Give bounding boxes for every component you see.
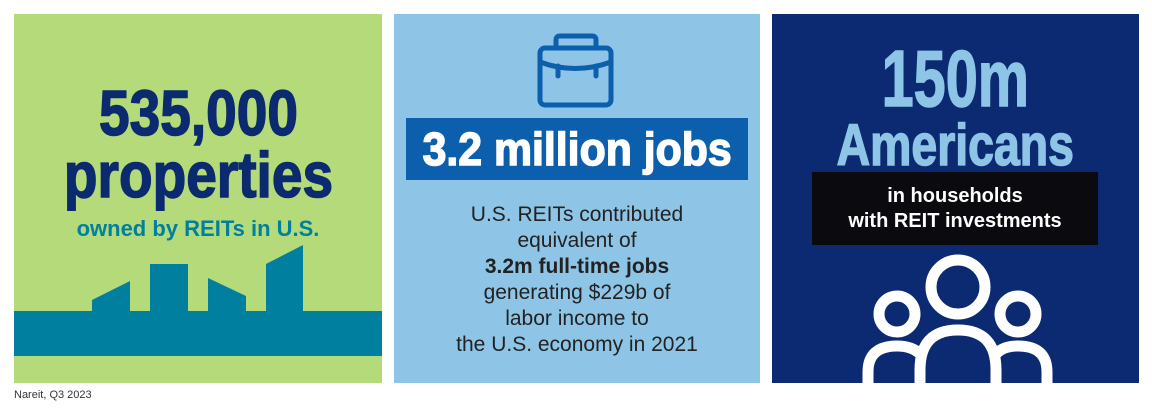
text block: jobs description: the U.S. economy in 2021 — [456, 333, 698, 356]
panel: Americans — [772, 14, 1139, 383]
icon: briefcase — [538, 34, 614, 108]
subtext: owned by REITs: owned by REITs in U.S. — [77, 216, 319, 241]
panel: properties — [14, 14, 382, 383]
heading: 535,000 properties: properties — [63, 139, 333, 211]
heading: 535,000 properties — [63, 77, 333, 211]
icon: people — [862, 254, 1052, 383]
heading: 535,000 properties: 535,000 — [99, 77, 297, 149]
callout: households: in households — [887, 185, 1023, 207]
heading: 150m Americans: Americans — [837, 113, 1074, 178]
text block: jobs description: equivalent of — [517, 229, 637, 252]
text block: jobs description: 3.2m full-time jobs — [485, 255, 669, 278]
source note: Nareit, Q3 2023 — [14, 389, 92, 401]
icon: skyline — [14, 245, 382, 356]
text block: jobs description: U.S. REITs contributed — [471, 203, 683, 226]
heading: 150m Americans — [837, 34, 1074, 178]
heading: 150m Americans: 150m — [882, 34, 1029, 123]
heading box: 3.2 million jobs: 3.2 million jobs — [422, 123, 732, 175]
text block: jobs description: generating $229b of — [484, 281, 670, 304]
callout: households: with REIT investments — [848, 210, 1062, 232]
text block: jobs description: labor income to — [505, 307, 649, 330]
panel: jobs — [394, 14, 760, 383]
callout: households — [812, 172, 1098, 245]
text block: jobs description — [456, 203, 698, 356]
